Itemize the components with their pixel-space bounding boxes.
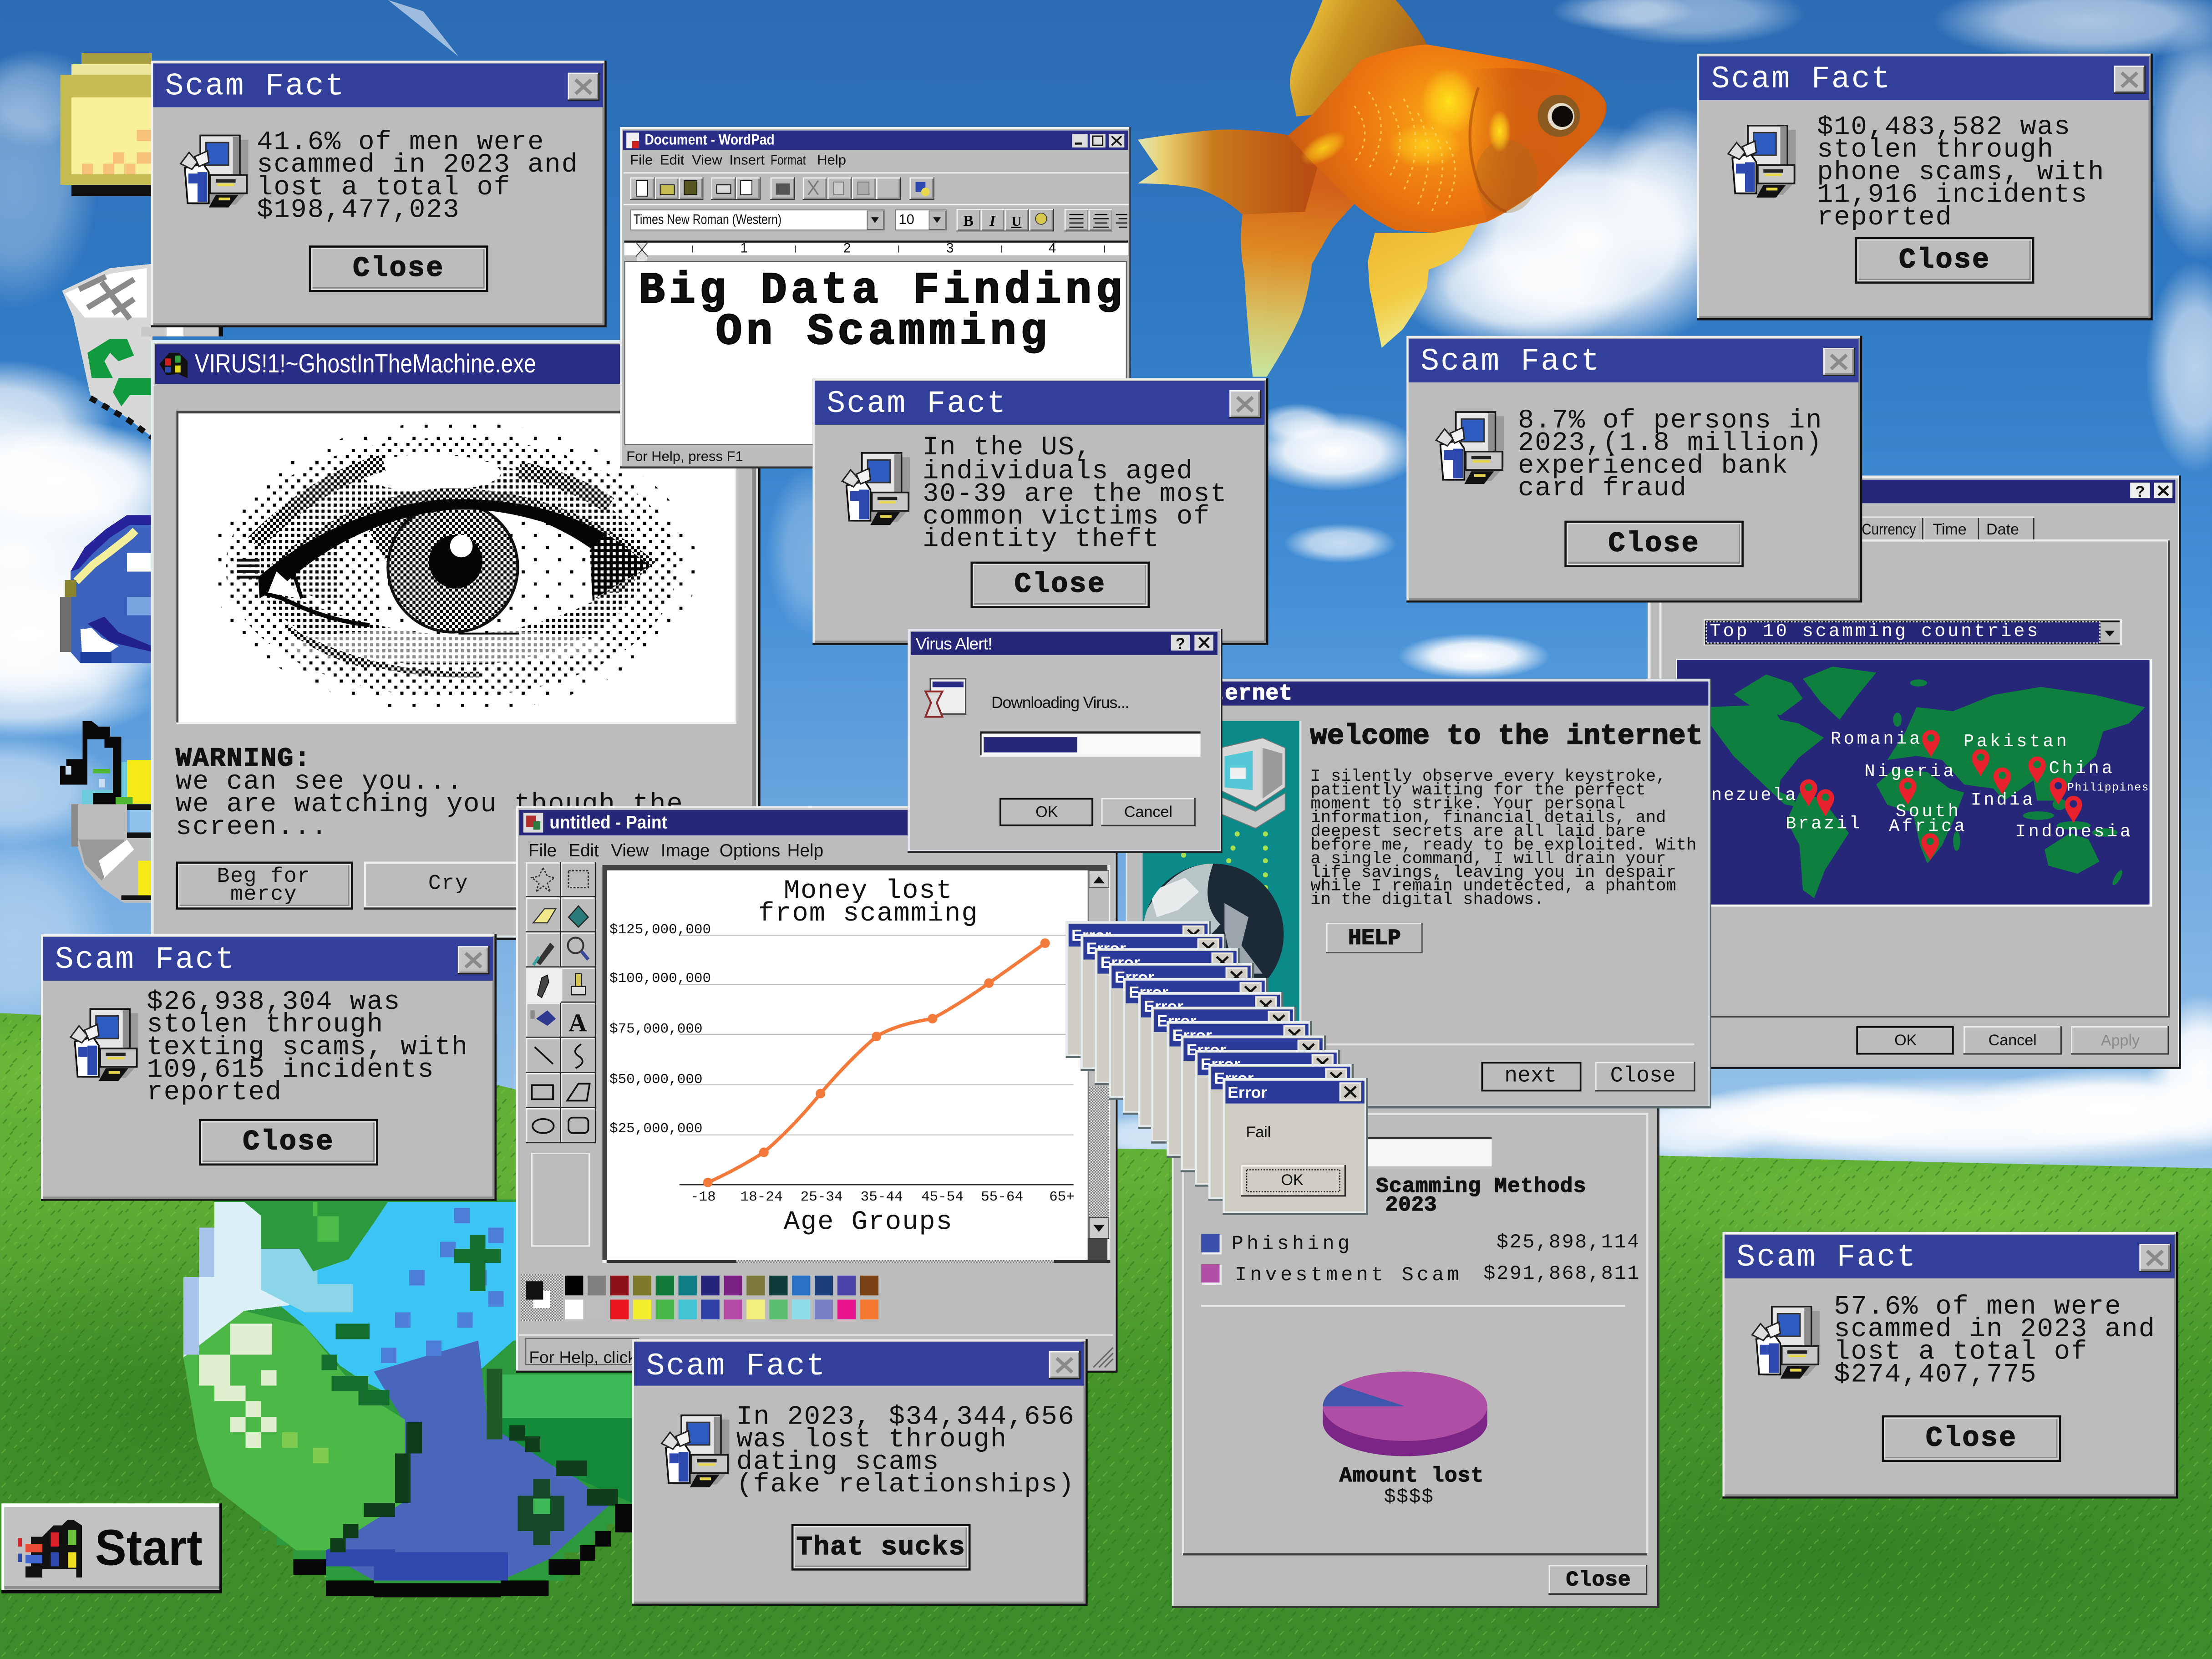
tabs: Currency [1862, 521, 1916, 538]
y axis labels: $50,000,000 [609, 1072, 703, 1088]
pie heading: 2023 [1385, 1193, 1437, 1217]
fact text: 11,916 incidents [1817, 179, 2088, 210]
line chart: money lost by age group [609, 875, 1075, 1237]
button: apply [2071, 1026, 2169, 1055]
country labels: Philippines [2067, 781, 2148, 794]
halftone eye [212, 422, 697, 712]
fact text: stolen through [1817, 134, 2054, 165]
status bar [519, 1334, 1113, 1367]
fact text: $198,477,023 [257, 195, 460, 225]
map pins [1800, 730, 2082, 860]
y axis labels: $100,000,000 [609, 971, 711, 987]
menu bar [528, 841, 823, 860]
error window stack: Error [1115, 968, 1154, 986]
format bar: I [989, 213, 996, 229]
paragraph: in the digital shadows. [1310, 890, 1544, 909]
globe land top [244, 1202, 388, 1272]
pie chart [1323, 1372, 1487, 1456]
x axis labels: 45-54 [921, 1189, 964, 1205]
background: sky [0, 0, 2212, 1171]
paragraph: I silently observe every keystroke, [1310, 767, 1666, 786]
button: beg for mercy [176, 862, 353, 910]
legend: phishing: $25,898,114 [1497, 1232, 1639, 1254]
button: cancel [1963, 1026, 2062, 1055]
fact text: identity theft [923, 524, 1160, 554]
gill [1470, 87, 1507, 212]
start label: Start [95, 1519, 203, 1576]
window title: Scam Fact [1736, 1240, 1917, 1275]
paragraph: life savings, leaving you in despair [1310, 863, 1676, 882]
country labels: Africa [1889, 817, 1965, 837]
close button: Close [243, 1125, 335, 1158]
green dots [1181, 831, 1268, 891]
warning text: we can see you... [176, 767, 463, 797]
body [1288, 45, 1607, 233]
separator [1309, 1043, 1694, 1045]
fact text: stolen through [147, 1009, 384, 1040]
ventral fin [1368, 222, 1479, 348]
country labels: China [2049, 758, 2112, 779]
paragraph: deepest secrets are all laid bare [1310, 822, 1646, 841]
internet heading: welcome to the internet [1310, 720, 1703, 752]
button: help [1326, 923, 1423, 953]
menu bar: View [611, 841, 649, 860]
legend: phishing [1201, 1232, 1639, 1256]
icon: install [1728, 126, 1796, 198]
warning text: WARNING: [176, 743, 311, 774]
title bar [911, 632, 1218, 655]
panel: scam fact dating scams [632, 1339, 1088, 1606]
canvas frame [603, 865, 1110, 1263]
menu bar: Insert [729, 152, 765, 168]
close button: Close [1608, 527, 1700, 560]
side picture [1142, 721, 1302, 1021]
panel: scamming methods pie window [1172, 1101, 1659, 1608]
y axis labels: $125,000,000 [609, 922, 711, 938]
button: ok [1856, 1026, 1954, 1055]
x axis title: Age Groups [784, 1207, 953, 1237]
close button: Close [1926, 1422, 2017, 1454]
menu bar: File [528, 841, 557, 860]
title bar: Virus Alert! [916, 634, 992, 653]
fact text: lost a total of [257, 172, 511, 203]
fact text [1817, 112, 2105, 233]
country labels: Venezuela [1687, 785, 1796, 805]
paragraph: before me, ready to be exploited. With [1310, 836, 1696, 855]
button: cancel: Cancel [1124, 803, 1172, 820]
that sucks button [791, 1524, 970, 1571]
windows flag logo [18, 1520, 82, 1578]
title bar [1127, 682, 1708, 706]
main title: Big Data Finding [639, 266, 1126, 316]
legend: phishing: Phishing [1232, 1233, 1350, 1256]
legend divider [1201, 1305, 1625, 1307]
chart title: Money lost [784, 875, 953, 906]
fact text: reported [147, 1077, 282, 1107]
icon: pixel globe [183, 1200, 635, 1598]
panel: virus alert dialog [908, 629, 1223, 853]
close button [199, 1119, 378, 1165]
title bar: the internet [1130, 682, 1292, 706]
window title: Scam Fact [165, 69, 345, 104]
paragraph: while I remain undetected, a phantom [1310, 877, 1676, 896]
warning text: screen... [176, 812, 328, 842]
fact text [1834, 1292, 2156, 1389]
error window stack: Error [1086, 939, 1126, 957]
paragraph: patiently waiting for the perfect [1310, 781, 1646, 800]
country dropdown: Top 10 scamming countries [1710, 621, 2038, 642]
format bar: Times New Roman (Western) [634, 211, 781, 227]
title bar: ? [1176, 635, 1185, 652]
icon: internet explorer [60, 515, 152, 663]
white input field [1354, 1137, 1492, 1166]
error window stack: Error [1071, 926, 1111, 945]
pie caption: Amount lost [1339, 1464, 1483, 1488]
button: apply: Apply [2101, 1032, 2140, 1049]
window title: Scam Fact [646, 1349, 827, 1384]
button: next: next [1504, 1064, 1557, 1088]
tabs [1834, 517, 2034, 541]
panel: scam fact bank card fraud [1406, 336, 1862, 602]
close button: Close [1015, 568, 1106, 600]
error window stack: Error [1129, 983, 1168, 1001]
x axis labels: 25-34 [801, 1189, 843, 1205]
error window stack: Error [1187, 1041, 1226, 1059]
format bar: U [1011, 213, 1021, 229]
fact text: reported [1817, 202, 1953, 233]
thin cloud wisp [388, 0, 458, 56]
ruler: 4 [1049, 240, 1056, 255]
fact text: scammed in 2023 and [257, 149, 578, 180]
ruler [624, 240, 1128, 261]
fact text: phone scams, with [1817, 157, 2105, 188]
close button [1882, 1415, 2061, 1462]
legend: investment scam [1201, 1263, 1639, 1287]
world map [1676, 659, 2152, 906]
panel: paint window with line chart [516, 806, 1117, 1373]
y axis labels [609, 922, 711, 1137]
fact text: was lost through [736, 1424, 1007, 1455]
button: beg for mercy: Beg for [217, 864, 311, 888]
icon: install [71, 1009, 138, 1081]
fact text [1518, 405, 1822, 504]
menu bar: Image [661, 841, 710, 860]
panel: scam fact phone scams [1697, 54, 2153, 321]
computer [1220, 738, 1285, 828]
fact text [736, 1401, 1075, 1500]
close button: Close [353, 252, 444, 285]
window title: Scam Fact [1711, 62, 1892, 97]
icon: install [181, 136, 249, 208]
title bar [155, 344, 752, 384]
button: beg for mercy: mercy [230, 882, 297, 906]
fact text: 30-39 are the most [923, 478, 1228, 509]
panel: virus window with eye [151, 340, 761, 940]
chart title [758, 875, 978, 929]
tool palette: A [568, 1009, 587, 1038]
error window stack: Error [1201, 1055, 1240, 1073]
start button [1, 1503, 222, 1593]
country labels: Indonesia [2015, 822, 2131, 842]
country labels: India [1971, 790, 2033, 810]
help and close buttons: ? [2135, 483, 2145, 500]
dorsal fin [1290, 0, 1427, 117]
close button [309, 245, 488, 292]
menu bar: File [630, 152, 653, 168]
fact text: 2023,(1.8 million) [1518, 428, 1822, 458]
legend: investment scam: $291,868,811 [1483, 1263, 1639, 1285]
title bar: VIRUS!1!~GhostInTheMachine.exe [195, 349, 536, 378]
ok button [1241, 1165, 1346, 1196]
icon: install [842, 453, 910, 525]
tool options box [532, 1153, 589, 1246]
clouds [0, 0, 2212, 1167]
icon: install [662, 1415, 729, 1487]
window title: Scam Fact [1421, 344, 1601, 379]
x axis labels: 65+ [1049, 1189, 1075, 1205]
ruler: 2 [843, 240, 851, 255]
paragraph: information, financial details, and [1310, 808, 1666, 827]
button: close: Close [1566, 1568, 1631, 1592]
menu bar: Edit [568, 841, 599, 860]
fact text: 8.7% of persons in [1518, 405, 1822, 436]
country labels: South [1896, 801, 1958, 821]
tabs: Date [1986, 521, 2019, 538]
icon: recycle bin [62, 264, 223, 438]
ruler: 3 [946, 240, 954, 255]
status bar: For Help, click [529, 1348, 636, 1367]
country labels: Romania [1831, 729, 1920, 749]
button: close [1595, 1062, 1695, 1091]
fact text: common victims of [923, 501, 1210, 532]
globe cloud [183, 1202, 289, 1358]
title bar [623, 131, 1128, 150]
fact text: $26,938,304 was [147, 987, 401, 1017]
scale highlights [1295, 68, 1511, 172]
button: ok [999, 798, 1093, 826]
button: next [1481, 1062, 1582, 1091]
tab panel [1660, 540, 2168, 1016]
inner group box [1183, 1114, 1647, 1554]
fact text [923, 432, 1228, 554]
fact text: dating scams [736, 1447, 939, 1477]
button: cancel [1101, 798, 1196, 826]
menu bar: Help [787, 841, 823, 860]
pie heading [1376, 1174, 1586, 1217]
title bar: Document - WordPad [644, 131, 775, 148]
button: ok: OK [1035, 803, 1058, 820]
country labels [1687, 729, 2148, 842]
panel: regional settings window with world map [1648, 476, 2181, 1069]
baseline axis [680, 1184, 1074, 1185]
globe pixel dither [199, 1208, 632, 1598]
menu bar: Help [817, 152, 846, 168]
legend: investment scam: Investment Scam [1235, 1264, 1459, 1287]
icon: hourglass window [925, 679, 966, 717]
format bar [624, 204, 1129, 231]
x axis labels [690, 1189, 1075, 1205]
x axis labels: 18-24 [741, 1189, 783, 1205]
icon: goldfish [1138, 0, 1607, 377]
button: cry [364, 862, 519, 910]
error window stack: Error [1157, 1012, 1197, 1030]
fact text: scammed in 2023 and [1834, 1314, 2156, 1344]
fact text [257, 127, 578, 225]
panel: scam fact men 57.6% [1722, 1232, 2178, 1499]
document page [625, 261, 1126, 445]
fact text: In 2023, $34,344,656 [736, 1401, 1075, 1432]
help and close buttons [2130, 483, 2172, 500]
front error dialog: Error [1228, 1083, 1267, 1101]
chart title: from scamming [758, 898, 978, 929]
head shading [1467, 68, 1606, 220]
eye image panel [176, 411, 736, 724]
button: close: Close [1610, 1064, 1676, 1088]
tool palette [526, 862, 596, 1143]
ruler: 1 [740, 240, 748, 255]
menu bar: Edit [660, 152, 685, 168]
error window stack: Error [1144, 997, 1183, 1015]
downloading text: Downloading Virus... [991, 693, 1129, 712]
fact text [147, 987, 468, 1107]
title bar [519, 810, 1111, 835]
country labels: Nigeria [1865, 762, 1954, 782]
pie heading: Scamming Methods [1376, 1174, 1586, 1198]
paragraph: a single command, I will drain your [1310, 850, 1666, 869]
error window stack: Error [1101, 953, 1140, 972]
icon: install [1436, 412, 1504, 484]
toolbar [624, 172, 1129, 200]
title bar: untitled - Paint [549, 812, 667, 832]
button: cancel: Cancel [1989, 1032, 2037, 1049]
button: ok: OK [1894, 1032, 1917, 1049]
x axis labels: 35-44 [861, 1189, 903, 1205]
y axis labels: $25,000,000 [609, 1121, 703, 1137]
main title: On Scamming [716, 307, 1051, 357]
fact text: In the US, [923, 432, 1092, 463]
button: help: HELP [1348, 926, 1401, 951]
pie caption: $$$$ [1384, 1486, 1433, 1509]
tabs: Time [1933, 521, 1967, 538]
error window stack: Error [1172, 1026, 1212, 1044]
window title: Scam Fact [55, 942, 235, 977]
fact text: (fake relationships) [736, 1469, 1075, 1500]
background: grass [0, 1013, 2212, 1659]
x axis labels: -18 [690, 1189, 716, 1205]
icon: music player [60, 721, 152, 903]
panel: scam fact identity theft [812, 378, 1268, 645]
ok button: OK [1281, 1171, 1304, 1189]
paragraph [1310, 767, 1696, 909]
fact text: card fraud [1518, 473, 1687, 504]
warning text [176, 743, 684, 842]
tail fin [1138, 130, 1354, 377]
data line [708, 943, 1045, 1182]
data points [703, 938, 1050, 1187]
button: close [1548, 1565, 1647, 1595]
fact text: 57.6% of men were [1834, 1292, 2122, 1322]
fact text: lost a total of [1834, 1337, 2088, 1367]
fact text: 41.6% of men were [257, 127, 544, 158]
group box shadow [1183, 1554, 1647, 1555]
colour palette [521, 1274, 878, 1321]
fact text: $10,483,582 was [1817, 112, 2071, 142]
globe land left [183, 1311, 405, 1550]
error window stack [1066, 921, 1368, 1215]
warning text: we are watching you though the [176, 789, 684, 819]
fail message: Fail [1246, 1124, 1271, 1141]
button: cry: Cry [428, 871, 468, 896]
pie caption [1339, 1464, 1483, 1509]
status bar: For Help, press F1 [626, 448, 743, 464]
eye [1537, 95, 1580, 137]
format bar: 10 [898, 211, 914, 227]
format bar: B [963, 213, 974, 229]
panel: welcome to the internet window [1126, 679, 1711, 1109]
close button [1564, 521, 1744, 567]
fact text: $274,407,775 [1834, 1359, 2037, 1389]
close button [1855, 237, 2034, 284]
progress bar [980, 731, 1201, 757]
close button: Close [1899, 244, 1990, 276]
tab panel edge [1660, 540, 2169, 1017]
icon: install [1752, 1307, 1820, 1379]
fact text: experienced bank [1518, 450, 1789, 481]
window title: Scam Fact [827, 387, 1007, 422]
fact text: texting scams, with [147, 1032, 468, 1062]
main title [639, 266, 1126, 357]
panel: wordpad title window [620, 127, 1131, 468]
fact text: individuals aged [923, 456, 1193, 487]
fact text: 109,615 incidents [147, 1054, 435, 1085]
menu bar [630, 152, 846, 168]
menu bar: Format [771, 152, 806, 168]
menu bar: Options [720, 841, 780, 860]
menu bar: View [692, 152, 722, 168]
country dropdown [1704, 619, 2122, 646]
gridlines [680, 935, 1074, 1135]
earth [1144, 863, 1284, 978]
that sucks button: That sucks [797, 1532, 966, 1562]
y axis labels: $75,000,000 [609, 1021, 703, 1037]
globe sea [261, 1202, 635, 1395]
x axis labels: 55-64 [981, 1189, 1023, 1205]
paragraph: moment to strike. Your personal [1310, 794, 1625, 814]
close button [970, 562, 1150, 608]
panel: scam fact texting scams [41, 934, 497, 1201]
panel: scam fact men 41.6% [151, 61, 607, 327]
error window stack: Error [1214, 1069, 1254, 1087]
front error dialog [1223, 1078, 1368, 1215]
country labels: Pakistan [1963, 732, 2067, 752]
icon: folder [60, 53, 152, 196]
country labels: Brazil [1786, 814, 1860, 834]
